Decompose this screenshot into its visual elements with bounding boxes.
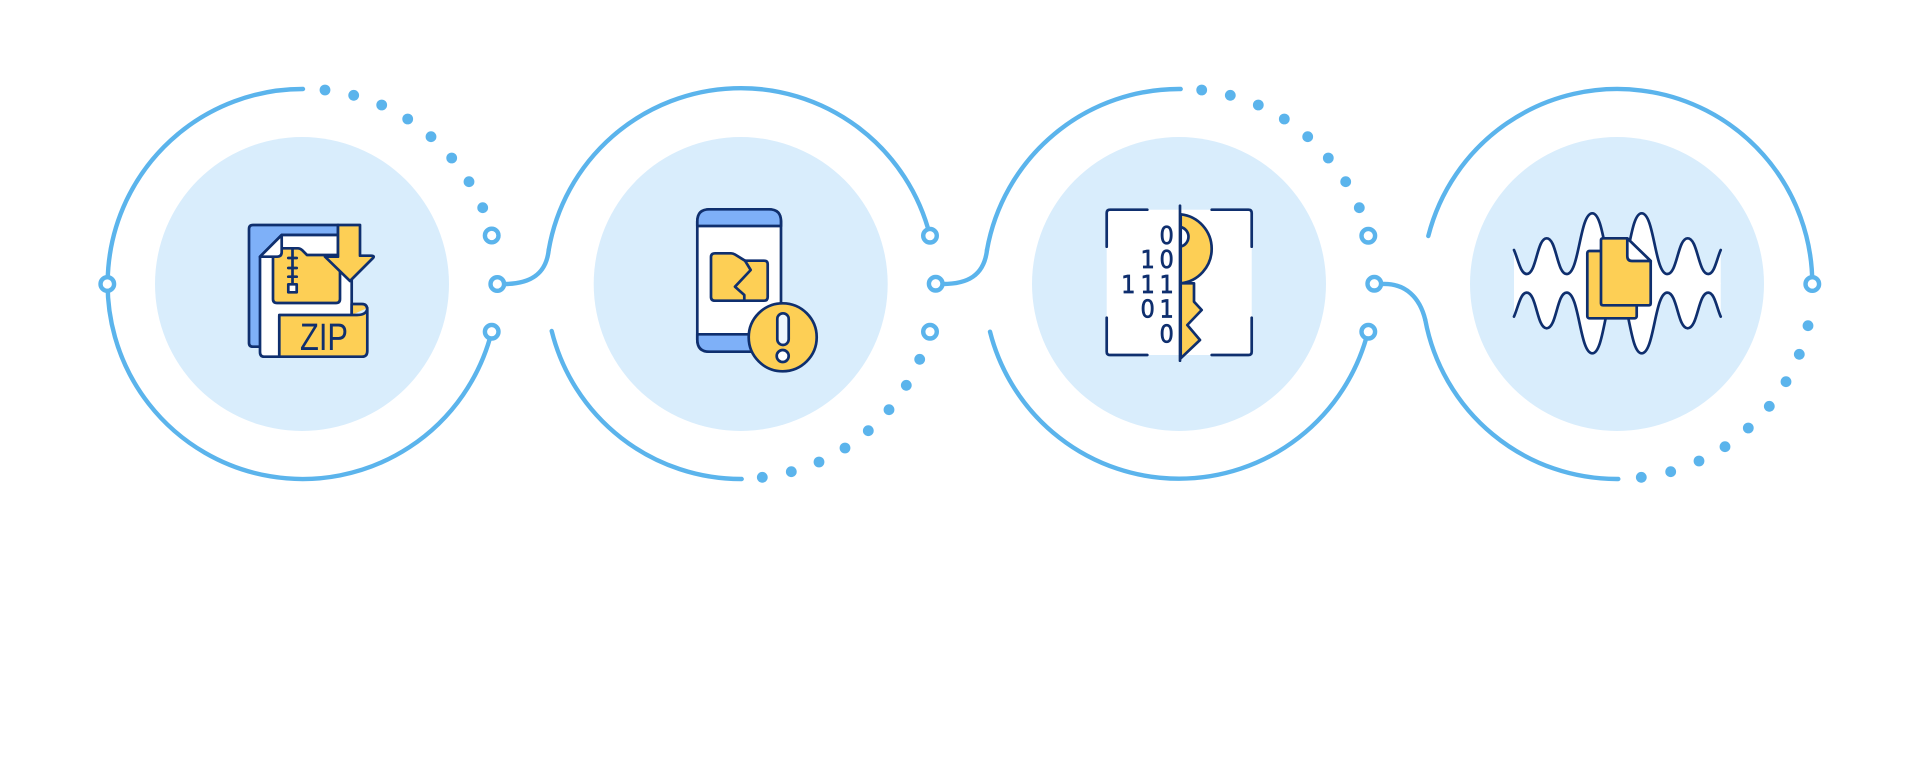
icon: zip file download (249, 225, 374, 359)
panel: step 2 corrupted file on phone (490, 88, 937, 483)
zip label: ZIP (300, 317, 348, 359)
connector 3 (1382, 284, 1425, 320)
icon: documents with waves (1514, 213, 1721, 353)
panel: step 1 zip file (100, 85, 499, 479)
ring 1 nodes (100, 229, 499, 339)
binary digits: 01 (1141, 294, 1174, 324)
icon: binary key (1107, 206, 1252, 361)
key hole (1181, 227, 1188, 246)
binary digits (1121, 221, 1174, 349)
scan brackets (1107, 210, 1252, 355)
divider (1179, 206, 1181, 361)
wave fill (1514, 213, 1721, 353)
banner (279, 304, 367, 357)
broken folder (711, 253, 768, 301)
dotted arc 4 (1636, 320, 1813, 483)
zipper pull (288, 284, 297, 292)
outer ring 2 lower (552, 331, 742, 479)
icon: phone with broken folder (697, 209, 817, 371)
inner circle 2 (594, 137, 888, 431)
phone (697, 209, 781, 352)
outer ring 1 (108, 89, 492, 479)
panel: step 4 file waves (1368, 89, 1819, 483)
zipper (288, 248, 297, 284)
back document (1587, 251, 1637, 318)
binary digits: 0 (1160, 221, 1174, 250)
outer ring 4 lower (1425, 320, 1618, 479)
inner circle 1 (155, 137, 449, 431)
front document (1601, 238, 1651, 305)
arrow (325, 225, 374, 281)
ring 2 nodes (490, 229, 937, 339)
panel: step 3 binary key (929, 85, 1375, 479)
bottom wave (1514, 293, 1721, 353)
inner circle 3 (1032, 137, 1326, 431)
dotted arc 3 (1196, 85, 1365, 213)
connector 2 (943, 250, 987, 284)
outer ring 2 upper (549, 88, 930, 250)
dotted arc 1 (320, 85, 488, 213)
binary digits: 0 (1160, 319, 1174, 349)
outer ring 3 upper (987, 89, 1181, 250)
binary digits: 111 (1121, 270, 1174, 299)
key half (1181, 214, 1212, 358)
top wave (1514, 213, 1721, 274)
dotted arc 2 (757, 354, 925, 483)
binary digits: 10 (1141, 245, 1174, 274)
outer ring 3 lower (990, 332, 1368, 479)
alert badge (749, 303, 817, 371)
inner circle 4 (1470, 137, 1764, 431)
ring 3 nodes (929, 229, 1375, 339)
outer ring 4 upper (1428, 89, 1812, 284)
page fold (1627, 238, 1651, 261)
connector 1 (504, 250, 549, 284)
ring 4 nodes (1368, 277, 1819, 291)
